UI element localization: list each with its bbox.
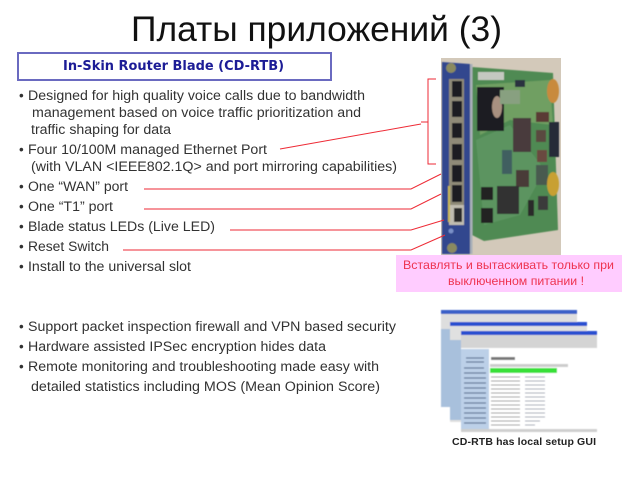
callout: power warning (396, 255, 622, 292)
callout: power warning: выключенном питании ! (448, 274, 584, 288)
text block: software features: • (19, 319, 24, 334)
title: Платы приложений (3) (131, 10, 502, 49)
text block: software features (19, 319, 396, 394)
heading box (18, 53, 331, 80)
text block: hardware features (19, 88, 397, 274)
text block: hardware features: Blade status LEDs (Live LED) (28, 219, 215, 234)
text block: hardware features: Install to the universal slot (28, 259, 191, 274)
text block: hardware features: (with VLAN <IEEE802.1Q> and port mirroring capabilities) (31, 159, 397, 174)
text block: software features: • (19, 359, 24, 374)
arrow: T1 port (144, 194, 441, 209)
screenshots: setup GUI windows (441, 310, 597, 448)
text block: software features: detailed statistics including MOS (Mean Opinion Score) (31, 379, 380, 394)
text block: hardware features: traffic shaping for data (31, 122, 172, 137)
text block: hardware features: • (19, 88, 24, 103)
text block: hardware features: Designed for high quality voice calls due to bandwidth (28, 88, 365, 103)
text block: hardware features: • (19, 179, 24, 194)
text block: hardware features: • (19, 199, 24, 214)
text block: hardware features: Reset Switch (28, 239, 109, 254)
text block: hardware features: • (19, 239, 24, 254)
arrow: WAN port (144, 174, 441, 189)
text block: software features: Remote monitoring and troubleshooting made easy with (28, 359, 379, 374)
caption: CD-RTB has local setup GUI (452, 436, 596, 448)
text block: software features: • (19, 339, 24, 354)
photo: router blade (441, 58, 561, 255)
text block: hardware features: management based on voice traffic prioritization and (32, 105, 361, 120)
heading box: In-Skin Router Blade (CD-RTB) (63, 59, 284, 74)
arrow: status LEDs (230, 220, 444, 230)
arrow: reset switch (123, 235, 445, 250)
arrow: ethernet port (280, 124, 421, 149)
text block: hardware features: One “T1” port (28, 199, 113, 214)
text block: software features: Support packet inspection firewall and VPN based security (28, 319, 396, 334)
text block: software features: Hardware assisted IPSec encryption hides data (28, 339, 327, 354)
bracket: ethernet ports (421, 79, 436, 164)
text block: hardware features: • (19, 259, 24, 274)
text block: hardware features: One “WAN” port (28, 179, 128, 194)
text block: hardware features: • (19, 219, 24, 234)
text block: hardware features: • (19, 142, 24, 157)
callout: power warning: Вставлять и вытаскивать только при (403, 258, 614, 272)
text block: hardware features: Four 10/100M managed Ethernet Port (28, 142, 267, 157)
